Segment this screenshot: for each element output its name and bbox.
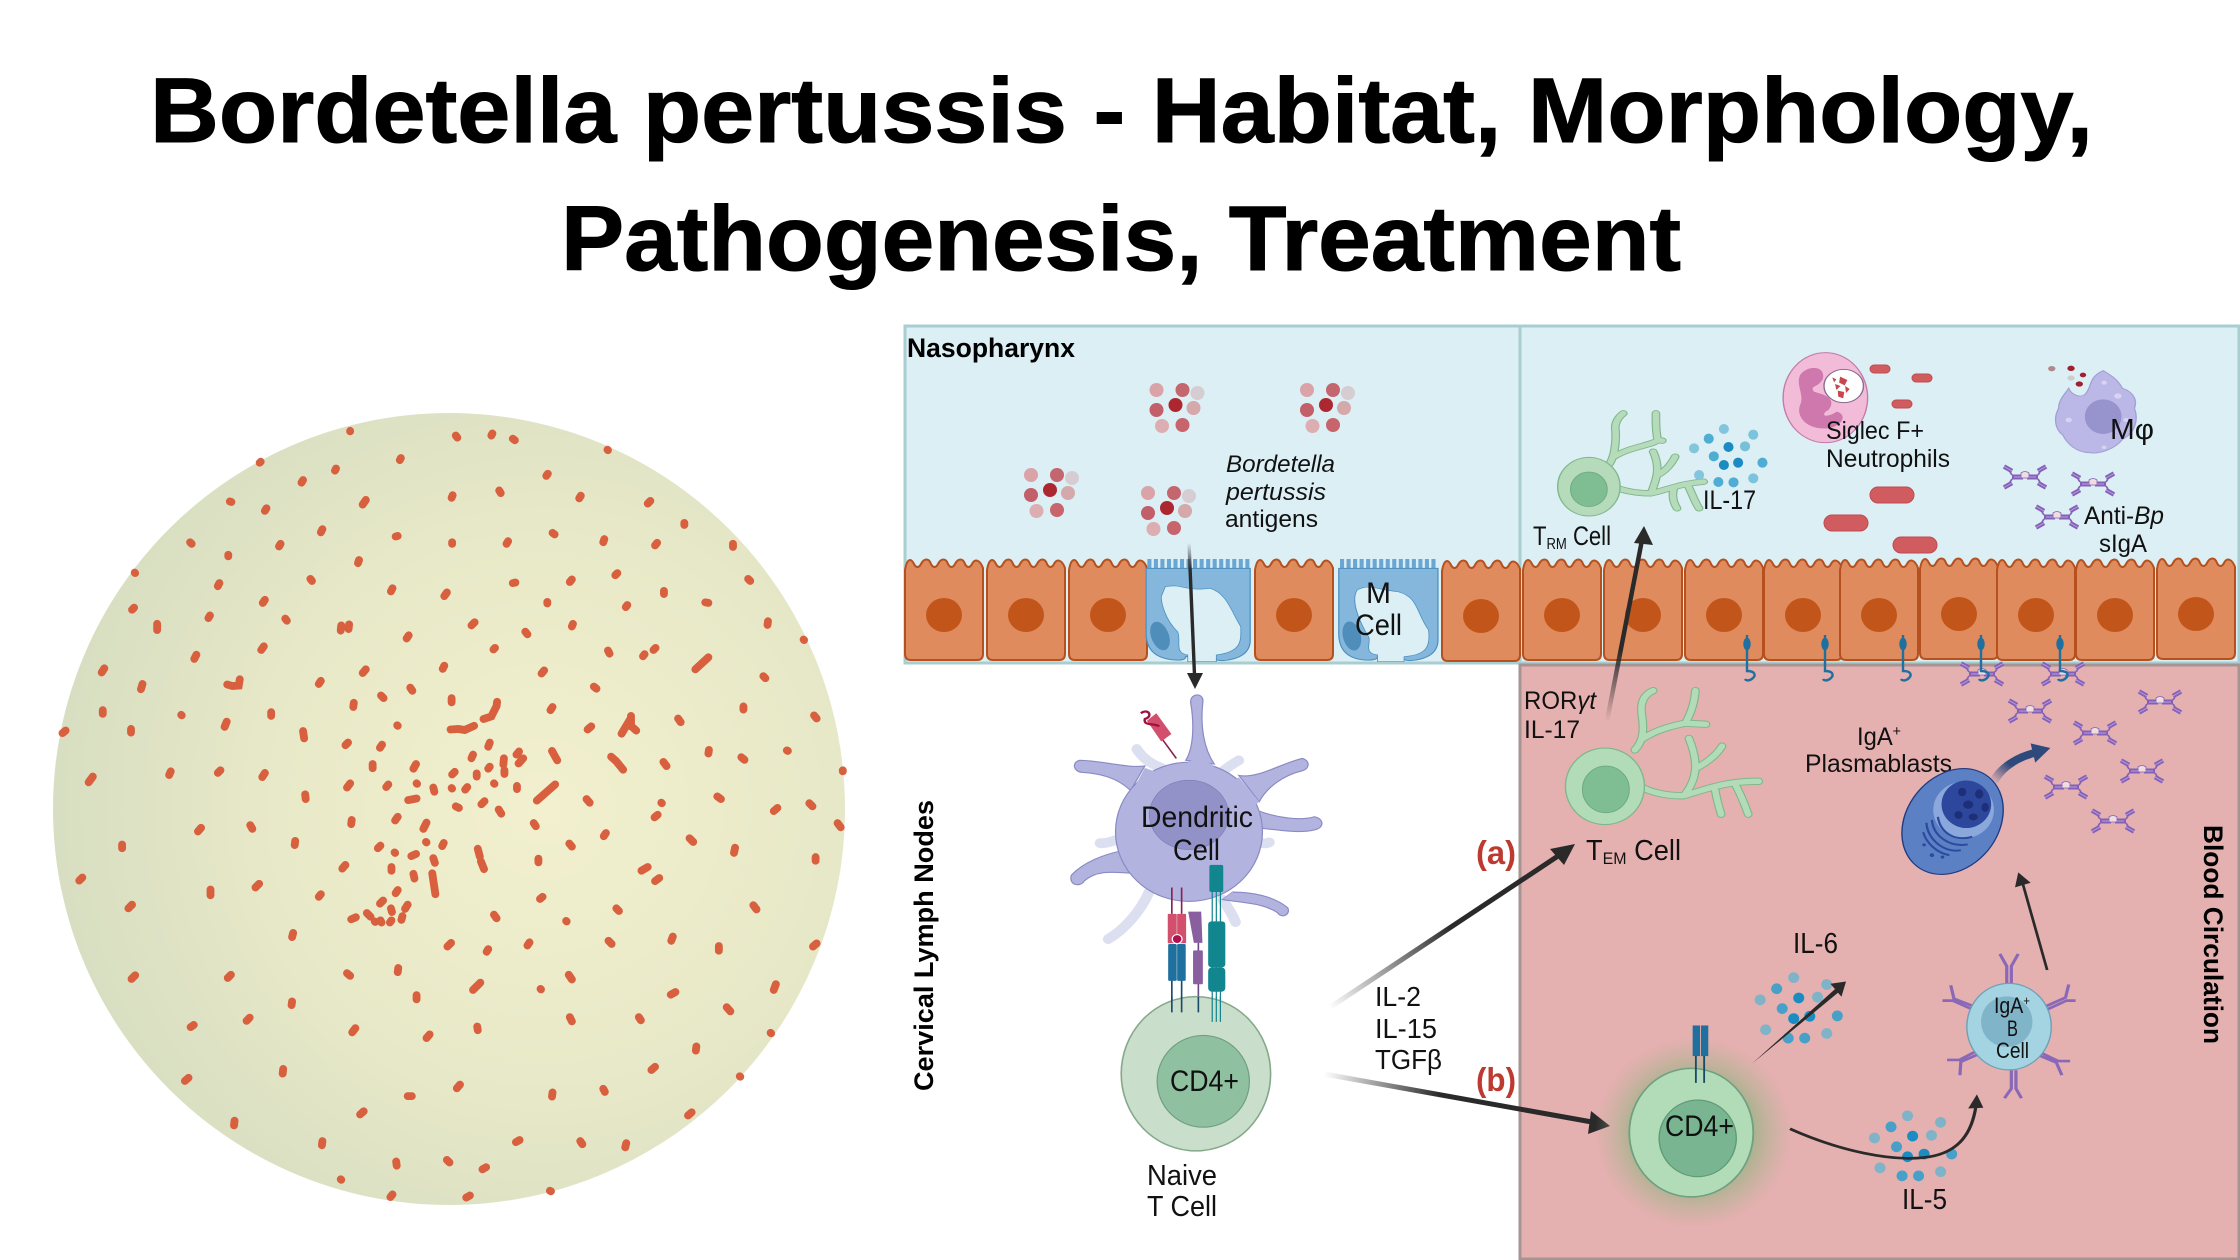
arrow: antibody secretion [1993, 743, 2050, 782]
TEM cell [1565, 691, 1759, 825]
arrow: IL-5 to B cell [1790, 1094, 1983, 1158]
label: Bordetella pertussis antigens: pertussis [1225, 479, 1326, 506]
arrow: antigen to dendritic cell [1187, 543, 1203, 689]
label: IgA+ Plasmablasts: Plasmablasts [1805, 750, 1952, 778]
micrograph: stained Bordetella pertussis bacteria [53, 413, 845, 1205]
label: Siglec F+ Neutrophils [1826, 417, 1950, 473]
label: Anti-Bp sIgA: sIgA [2099, 530, 2147, 558]
icon: dendritic cell [1071, 695, 1322, 1022]
heading: Cervical Lymph Nodes: Cervical Lymph Nodes [909, 800, 939, 1091]
label: IgA+ Plasmablasts: IgA [1857, 723, 1895, 751]
label: Mφ: Mφ [2110, 414, 2154, 446]
TCR and MHC receptor complex [1168, 865, 1225, 1022]
M cells [1146, 565, 1438, 662]
arrow (a) [1329, 844, 1575, 1008]
label: TEM Cell: T [1586, 835, 1604, 867]
label: Siglec F+ Neutrophils: Neutrophils [1826, 445, 1950, 473]
label: IL-17 nasopharynx: IL-17 [1703, 485, 1756, 515]
label: RORγt IL-17: RORγt [1524, 687, 1597, 715]
title: Bordetella pertussis - Habitat, Morphology, [150, 60, 2093, 162]
rod bacteria [1824, 365, 1937, 553]
label: cytokines IL-2 IL-15 TGFβ: IL-2 [1375, 981, 1421, 1012]
label: Dendritic Cell [1141, 801, 1253, 867]
label: Bordetella pertussis antigens: antigens [1225, 506, 1318, 533]
label: IgA+ B Cell: + [2023, 993, 2030, 1008]
label: IgA+ B Cell: IgA [1994, 993, 2027, 1018]
icons: secretory IgA antibodies [1961, 466, 2181, 832]
title [150, 60, 2093, 290]
arrow (b) [1324, 1074, 1610, 1134]
label: Dendritic Cell: Dendritic [1141, 801, 1253, 834]
label: cytokines IL-2 IL-15 TGFβ: TGFβ [1375, 1044, 1442, 1075]
back processes [1100, 749, 1269, 939]
epithelial cell layer [905, 558, 2235, 661]
label: Naive T Cell: Naive [1147, 1160, 1217, 1192]
label: (b): (b) [1476, 1061, 1516, 1098]
label: Naive T Cell [1147, 1160, 1217, 1223]
label: IgA+ B Cell: B [2007, 1016, 2018, 1041]
label: TEM Cell: Cell [1627, 835, 1681, 867]
cytokines: IL-6 [1755, 972, 1843, 1043]
label: Anti-Bp sIgA [2084, 502, 2164, 558]
main body and processes [1071, 695, 1322, 916]
icon: activated CD4 T cell with glow [1595, 1025, 1792, 1228]
label: IgA+ Plasmablasts: + [1893, 723, 1901, 740]
label: TRM Cell: T [1533, 521, 1550, 551]
label: M Cell: Cell [1355, 609, 1402, 642]
label: Anti-Bp sIgA: Anti-Bp [2084, 502, 2164, 530]
antigen clusters [1024, 383, 1355, 536]
title: Pathogenesis, Treatment [561, 188, 1681, 290]
label: IL-6: IL-6 [1793, 928, 1838, 960]
label: IgA+ Plasmablasts [1805, 723, 1952, 778]
label: M Cell [1355, 577, 1402, 642]
label: TRM Cell: RM [1546, 536, 1567, 553]
label: Bordetella pertussis antigens: Bordetella [1226, 451, 1335, 478]
arrow: IL-6 release [1752, 981, 1846, 1064]
label: RORγt IL-17 [1524, 687, 1597, 744]
heading: Blood Circulation: Blood Circulation [2198, 825, 2228, 1044]
icon: macrophage [2048, 366, 2136, 453]
M cell right [1339, 565, 1438, 662]
label: Naive T Cell: T Cell [1147, 1191, 1217, 1223]
panel: nasopharynx [905, 326, 2239, 663]
antigen presenting molecule [1141, 711, 1176, 758]
receptors crossing the epithelium [1744, 635, 2068, 680]
label: M Cell: M [1366, 577, 1391, 610]
label: RORγt IL-17: IL-17 [1524, 716, 1580, 744]
label: TRM Cell: Cell [1567, 521, 1611, 551]
label: CD4+ blood: CD4+ [1665, 1110, 1734, 1143]
icon: plasmablast [1884, 756, 2021, 887]
label: (a): (a) [1476, 834, 1516, 871]
heading: Nasopharynx: Nasopharynx [907, 333, 1075, 363]
icon: IgA+ B cell [1942, 954, 2076, 1098]
label: TEM Cell: EM [1603, 849, 1627, 868]
TRM cell [1558, 413, 1704, 516]
label: Dendritic Cell: Cell [1173, 834, 1220, 867]
M cell left [1146, 565, 1250, 662]
arrow: B cell to plasmablast [2015, 872, 2047, 970]
cytokines: IL-17 [1689, 424, 1768, 487]
label: IgA+ B Cell: Cell [1996, 1038, 2029, 1063]
label: cytokines IL-2 IL-15 TGFβ [1375, 981, 1442, 1075]
label: IgA+ B Cell [1994, 993, 2030, 1063]
cytokines: IL-5 [1869, 1110, 1957, 1181]
panel: blood circulation [1520, 665, 2239, 1259]
label: IL-5: IL-5 [1902, 1184, 1947, 1216]
label: CD4+ naive: CD4+ [1170, 1065, 1239, 1098]
label: cytokines IL-2 IL-15 TGFβ: IL-15 [1375, 1013, 1437, 1044]
arrow: TEM to TRM [1607, 526, 1653, 721]
label: Siglec F+ Neutrophils: Siglec F+ [1826, 417, 1924, 445]
label: Bordetella pertussis antigens [1225, 451, 1335, 533]
icon: naive CD4 T cell [1121, 997, 1271, 1151]
icon: Siglec F+ neutrophil [1783, 353, 1868, 443]
